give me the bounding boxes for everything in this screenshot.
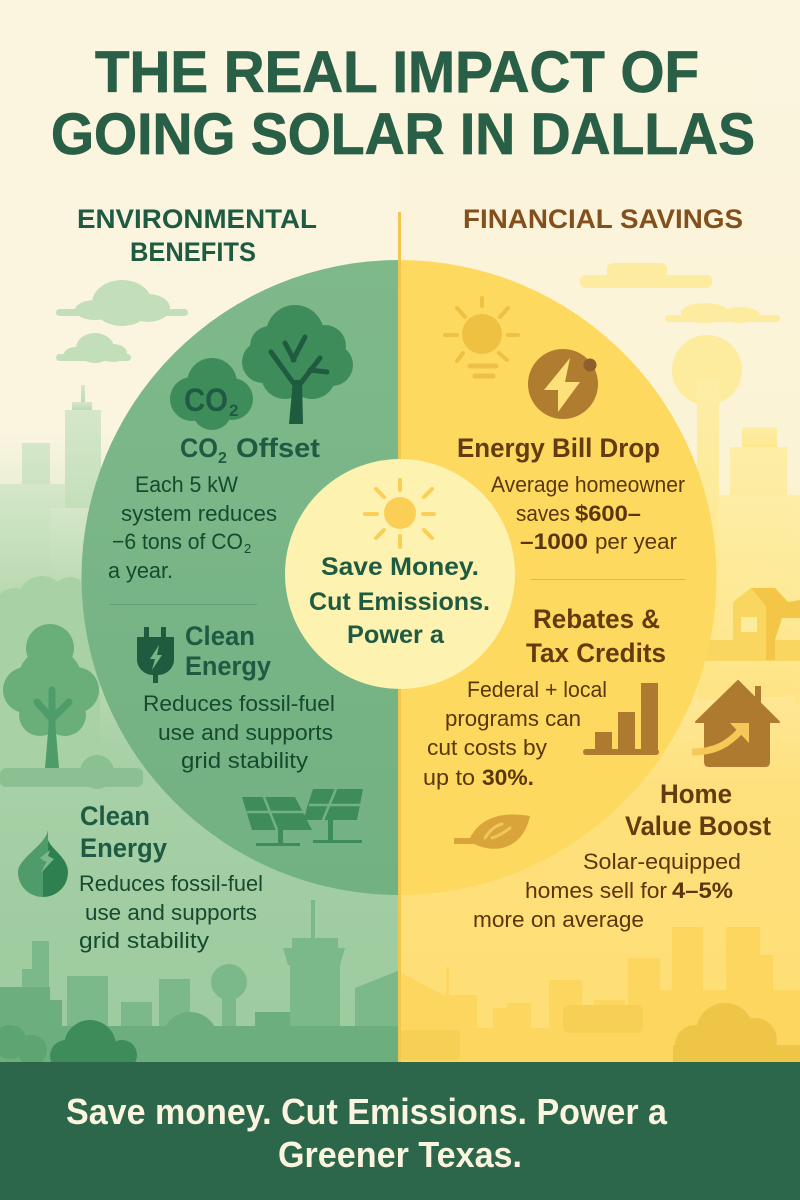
heading: home value boost (625, 779, 771, 841)
text: home value body (473, 849, 741, 932)
text: footer message (66, 1091, 668, 1175)
icon: solar panels (242, 789, 363, 846)
heading: rebates: Rebates & (533, 604, 660, 634)
text: clean energy body: Reduces fossil-fuel (143, 691, 335, 716)
central divider line (398, 212, 401, 1062)
text: energy bill body: $600– (575, 501, 641, 526)
text: center message (309, 553, 490, 649)
text: rebates body: Federal + local (467, 677, 607, 702)
heading: CO2 offset: CO (180, 433, 218, 463)
icon: bar chart (583, 683, 659, 755)
text: rebates body: 30%. (482, 765, 534, 790)
icon: center sun (365, 480, 434, 547)
text: center message: Save Money. (321, 553, 479, 581)
text: energy bill body: –1000 (520, 529, 588, 554)
heading: CO2 offset: Offset (236, 433, 320, 463)
text: CO2 offset body (108, 472, 277, 583)
text: clean energy lower body: Reduces fossil-fuel (79, 871, 263, 896)
panel: main circle (81, 260, 716, 895)
background: left upper skyline and clouds (0, 280, 188, 775)
text: clean energy body (143, 691, 335, 773)
heading: rebates (526, 604, 666, 668)
text: clean energy lower body: use and supports (85, 900, 257, 925)
panel: rebates and tax credits (423, 604, 666, 849)
icon: CO2 cloud: CO (184, 382, 228, 418)
background: right lower skyline (400, 927, 800, 1065)
heading: clean energy: Clean (185, 621, 255, 651)
heading: financial savings: FINANCIAL SAVINGS (463, 204, 743, 234)
text: CO2 offset body: a year. (108, 558, 173, 583)
title (51, 40, 755, 167)
text: center message: Cut Emissions. (309, 588, 490, 616)
panel: center circle (285, 459, 515, 689)
heading: home value boost: Value Boost (625, 811, 771, 841)
heading: clean energy lower (80, 801, 167, 863)
heading: CO2 offset: 2 (218, 450, 227, 467)
heading: energy bill drop: Energy Bill Drop (457, 433, 660, 463)
icon: tree (242, 305, 353, 424)
text: CO2 offset body: system reduces (121, 501, 277, 526)
text: energy bill body: saves (516, 501, 570, 526)
heading: home value boost: Home (660, 779, 732, 809)
icon: bolt coin (528, 349, 598, 419)
icon: plug (137, 627, 174, 683)
text: rebates body: cut costs by (427, 735, 547, 760)
text: CO2 offset body: −6 tons of CO (112, 529, 243, 554)
text: energy bill body: per year (595, 529, 677, 554)
heading: environmental benefits: BENEFITS (130, 237, 256, 267)
heading: clean energy lower: Clean (80, 801, 150, 831)
text: clean energy body: grid stability (181, 748, 308, 773)
heading: CO2 offset (180, 433, 320, 467)
icon: house with arrow (692, 681, 779, 766)
text: center message: Power a (347, 621, 445, 649)
panel: CO2 offset (108, 305, 353, 583)
icon: droplet with bolt (18, 830, 68, 897)
text: energy bill body (491, 472, 685, 554)
panel: clean energy (circle) (137, 621, 363, 846)
heading: environmental benefits (77, 204, 317, 267)
text: rebates body: up to (423, 765, 475, 790)
heading: clean energy (185, 621, 271, 681)
text: home value body: homes sell for (525, 878, 667, 903)
heading: environmental benefits: ENVIRONMENTAL (77, 204, 317, 234)
panel: home value boost (473, 681, 779, 932)
background: right upper skyline, tower and clouds (580, 263, 800, 703)
panel: clean energy (lower) (18, 801, 263, 953)
title: GOING SOLAR IN DALLAS (51, 102, 755, 167)
text: rebates body (423, 677, 607, 790)
background: left tree (0, 624, 143, 789)
text: rebates body: programs can (445, 706, 581, 731)
text: clean energy lower body: grid stability (79, 928, 209, 953)
heading: clean energy lower: Energy (80, 833, 167, 863)
title: THE REAL IMPACT OF (95, 40, 699, 105)
heading: clean energy: Energy (185, 651, 271, 681)
icon: leaf (454, 815, 530, 849)
panel: energy bill drop (445, 298, 685, 554)
footer banner (0, 1062, 800, 1200)
text: home value body: more on average (473, 907, 644, 932)
icon: CO2 cloud (170, 358, 253, 430)
background: left lower skyline (0, 900, 400, 1072)
text: home value body: 4–5% (672, 878, 733, 903)
text: energy bill body: Average homeowner (491, 472, 685, 497)
icon: CO2 cloud: 2 (229, 401, 238, 420)
text: clean energy lower body (79, 871, 263, 953)
text: clean energy body: use and supports (158, 720, 333, 745)
icon: sun bulb (445, 298, 518, 376)
text: home value body: Solar-equipped (583, 849, 741, 874)
text: footer message: Save money. Cut Emissions. Power a (66, 1091, 668, 1132)
heading: rebates: Tax Credits (526, 638, 666, 668)
text: CO2 offset body: 2 (244, 541, 251, 556)
text: CO2 offset body: Each 5 kW (135, 472, 238, 497)
text: footer message: Greener Texas. (278, 1134, 522, 1175)
